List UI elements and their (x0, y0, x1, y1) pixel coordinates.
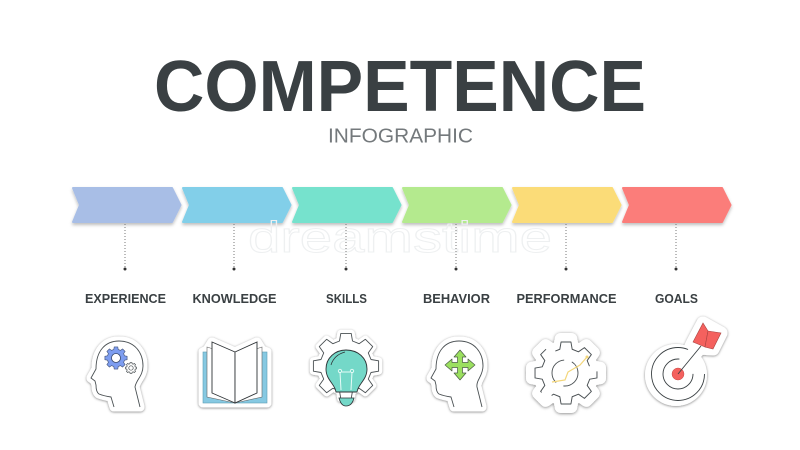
watermark: dreamstime (248, 213, 552, 262)
subtitle: INFOGRAPHIC (328, 124, 473, 148)
step labels (85, 292, 698, 306)
icon: goals target with arrow (645, 323, 721, 406)
icon: experience head (91, 341, 143, 407)
icon: skills light bulb in gear (313, 333, 379, 406)
title: COMPETENCE (154, 47, 646, 127)
step labels: EXPERIENCE (85, 292, 166, 306)
step labels: GOALS (655, 292, 698, 306)
chevron timeline (73, 188, 730, 222)
icon: behavior head with arrows (431, 341, 483, 407)
connector lines (124, 224, 678, 270)
icon: performance gear (532, 339, 600, 407)
step labels: SKILLS (326, 292, 367, 306)
step labels: BEHAVIOR (423, 292, 490, 306)
step labels: PERFORMANCE (516, 292, 616, 306)
step labels: KNOWLEDGE (192, 292, 276, 306)
icon: knowledge book (203, 342, 267, 403)
